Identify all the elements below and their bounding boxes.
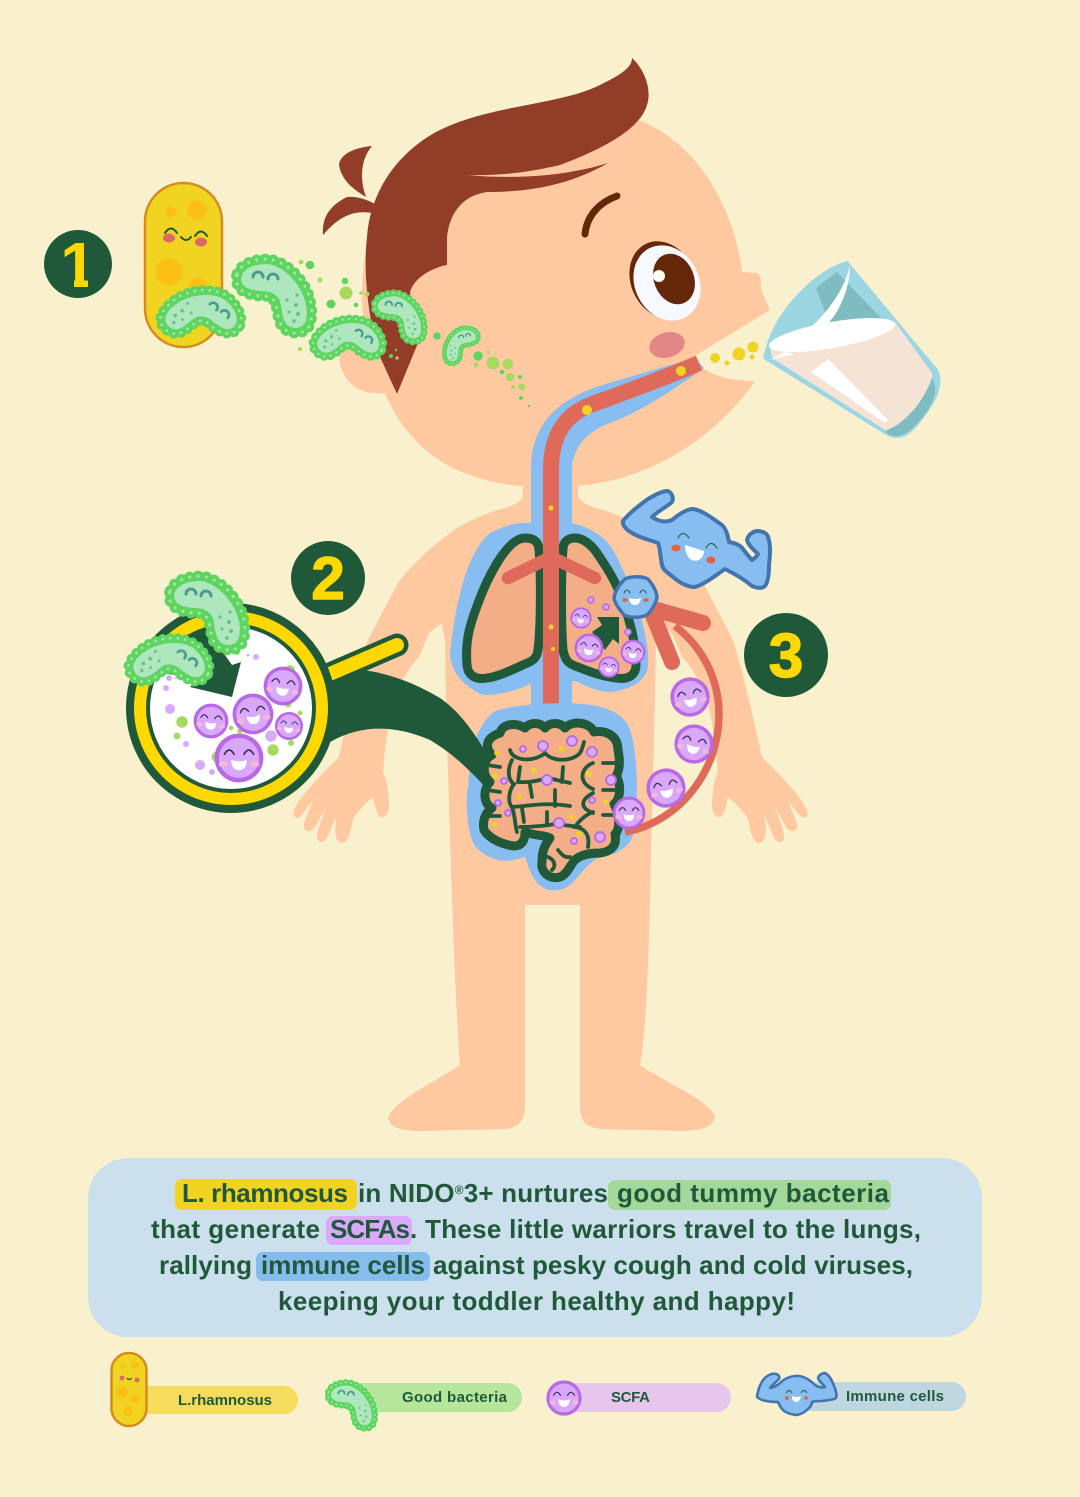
funnel to intestine bbox=[330, 669, 488, 790]
cheek bbox=[646, 328, 688, 362]
left arm and hand bbox=[293, 526, 461, 843]
legend: Immune cells: Immune cells bbox=[846, 1388, 944, 1405]
big immune cell flexing bbox=[623, 491, 770, 588]
SCFA cells travelling along arm bbox=[614, 676, 715, 828]
step 1 badge: 1 bbox=[60, 229, 96, 301]
arrow inside lung bbox=[592, 617, 619, 650]
torso and legs bbox=[388, 470, 715, 1131]
step 1 badge bbox=[44, 229, 112, 301]
body text: ® bbox=[455, 1183, 464, 1197]
body text: good tummy bacteria bbox=[617, 1178, 890, 1208]
hair bbox=[323, 58, 649, 394]
body text: keeping your toddler healthy and happy! bbox=[278, 1286, 795, 1316]
legend: L.rhamnosus: L.rhamnosus bbox=[178, 1392, 272, 1409]
body text: L. rhamnosus bbox=[182, 1178, 348, 1208]
yellow particles bbox=[492, 746, 609, 837]
esophagus: blue surround bbox=[531, 358, 704, 712]
folds bbox=[484, 742, 618, 870]
lens frame bbox=[126, 603, 336, 813]
legend: Immune cells bbox=[757, 1373, 966, 1415]
SCFA characters in lens bbox=[194, 666, 303, 780]
right arm and hand bbox=[640, 526, 808, 843]
L. rhamnosus character bbox=[145, 183, 222, 347]
small immune cell bbox=[614, 577, 657, 617]
right lung bbox=[562, 538, 636, 678]
description panel bbox=[88, 1158, 982, 1337]
purple particles bbox=[163, 654, 277, 775]
head bbox=[339, 109, 770, 488]
body text: against pesky cough and cold viruses, bbox=[433, 1250, 913, 1280]
immune route arrow bbox=[625, 608, 719, 832]
body text: 3+ nurtures bbox=[464, 1178, 608, 1208]
lung halo bbox=[450, 523, 648, 695]
intestine bbox=[483, 723, 620, 878]
eyebrow bbox=[585, 196, 617, 234]
green particles bbox=[174, 649, 302, 762]
highlights bbox=[175, 1179, 891, 1281]
milk droplets bbox=[548, 342, 758, 718]
legend: SCFA: SCFA bbox=[611, 1389, 650, 1406]
body text: . These little warriors travel to the lungs, bbox=[410, 1214, 921, 1244]
large intestine body bbox=[483, 723, 620, 878]
purple particles bbox=[495, 736, 616, 844]
glass of milk bbox=[764, 262, 939, 437]
particles released by bacteria bbox=[298, 260, 530, 407]
intestine halo bbox=[467, 703, 637, 891]
body text: that generate bbox=[151, 1214, 320, 1244]
step 2 badge: 2 bbox=[311, 545, 345, 612]
step 3 badge bbox=[744, 613, 828, 697]
arrow into lens bbox=[160, 630, 241, 697]
esophagus: red tube bbox=[551, 363, 699, 722]
step 2 badge bbox=[291, 541, 365, 615]
toddler figure bbox=[293, 58, 808, 1131]
body text bbox=[151, 1178, 921, 1316]
handle bbox=[332, 645, 397, 673]
eye bbox=[617, 230, 713, 332]
legend: Good bacteria bbox=[328, 1382, 522, 1428]
body text: immune cells bbox=[261, 1250, 425, 1280]
small particles bbox=[588, 597, 631, 635]
legend: Good bacteria: Good bacteria bbox=[402, 1389, 508, 1406]
body text: in NIDO bbox=[358, 1178, 455, 1208]
step 3 badge: 3 bbox=[769, 622, 803, 691]
bronchi bbox=[508, 557, 595, 578]
magnifying glass bbox=[126, 603, 488, 813]
good bacteria stream bbox=[155, 259, 481, 384]
lung arrow and SCFA cells bbox=[570, 597, 646, 678]
body text: rallying bbox=[159, 1250, 252, 1280]
body text: SCFAs bbox=[330, 1214, 410, 1244]
legend: L.rhamnosus bbox=[112, 1353, 298, 1426]
bacteria in magnifier bbox=[123, 576, 245, 713]
legend: SCFA bbox=[548, 1382, 731, 1414]
lungs bbox=[450, 523, 648, 695]
left lung bbox=[467, 538, 540, 678]
